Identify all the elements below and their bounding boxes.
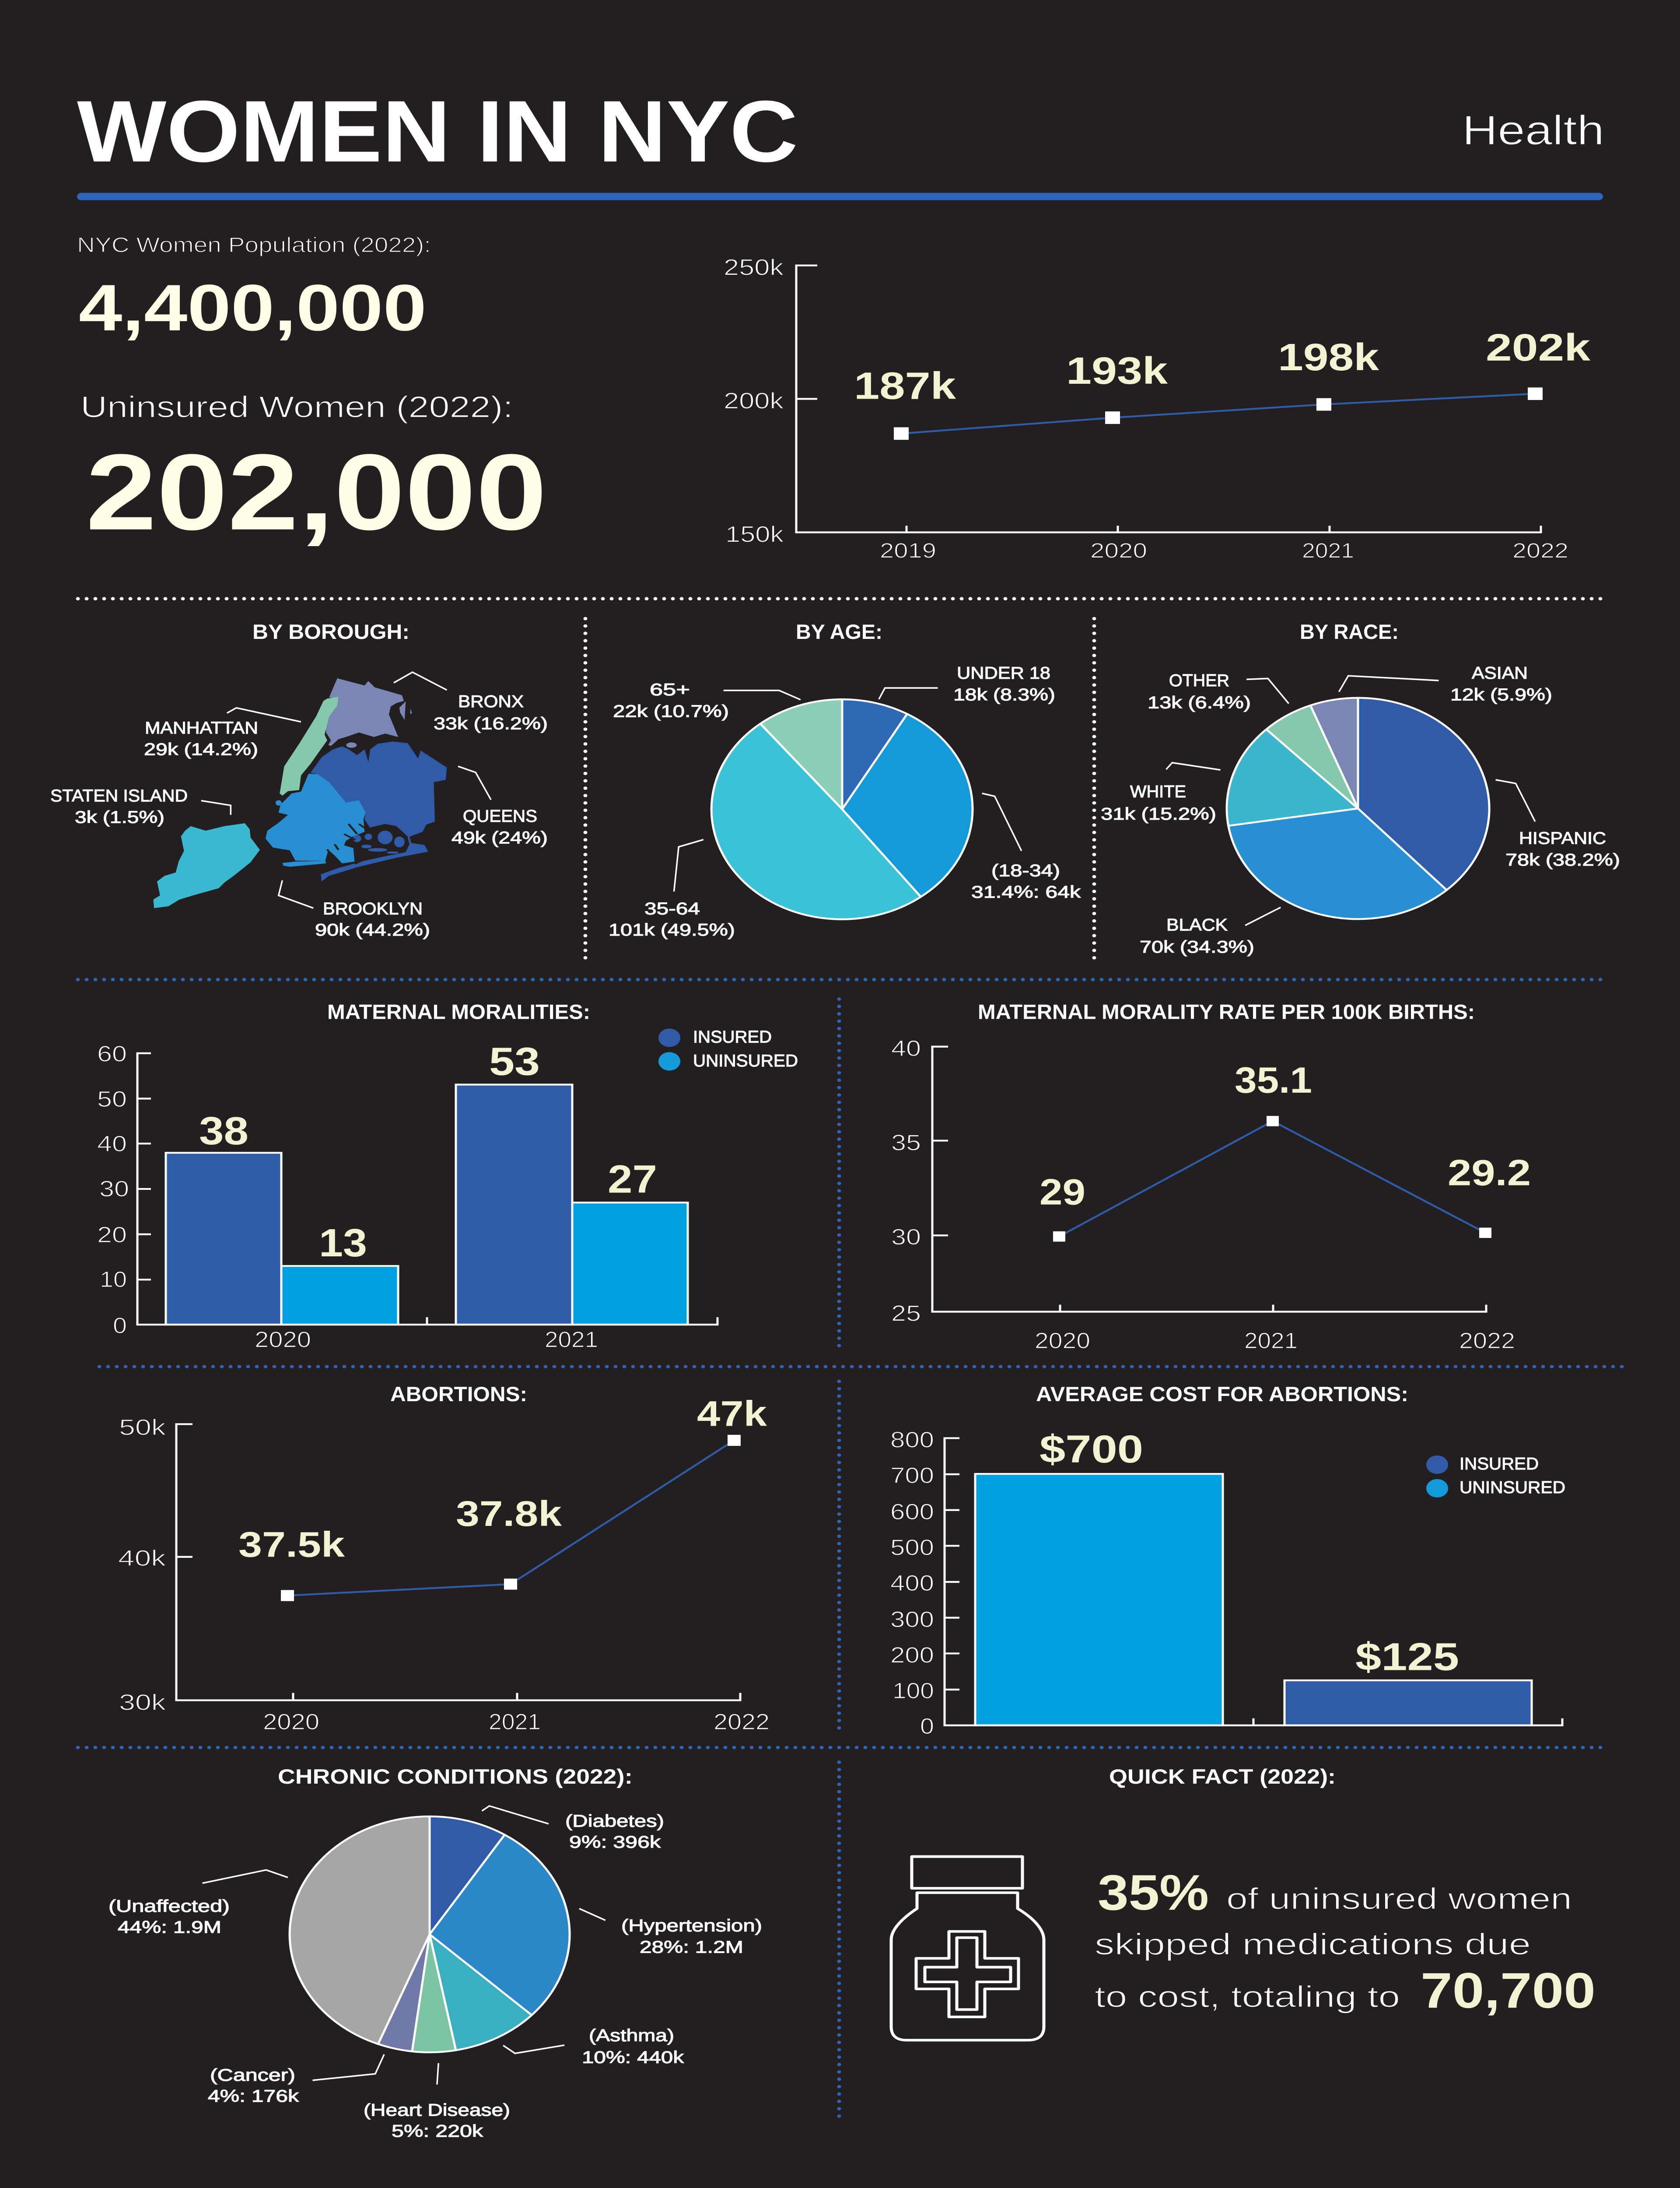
leader lines: age bbox=[674, 688, 1022, 891]
panel: chronic conditions bbox=[108, 1765, 762, 2141]
line chart: abortions: 47k bbox=[697, 1394, 767, 1434]
label: staten island bbox=[50, 786, 188, 827]
line chart: maternal morality rate: 2021 bbox=[1244, 1328, 1298, 1353]
label: queens: QUEENS bbox=[463, 806, 537, 826]
line chart: uninsured women 2019-2022: 150k bbox=[725, 522, 784, 547]
label: queens bbox=[452, 806, 548, 848]
line chart: uninsured women 2019-2022: 187k bbox=[854, 365, 956, 407]
legend: maternal moralities: UNINSURED bbox=[693, 1052, 798, 1070]
bar chart: maternal moralities: 53 bbox=[489, 1039, 540, 1083]
label: NYC women population: NYC Women Population (2022): bbox=[77, 233, 431, 257]
legend: average cost: UNINSURED bbox=[1460, 1478, 1565, 1497]
label: bronx bbox=[434, 692, 548, 733]
line chart: uninsured women 2019-2022: 198k bbox=[1278, 336, 1379, 379]
bar chart: maternal moralities: 50 bbox=[97, 1087, 127, 1112]
line chart: uninsured women 2019-2022: 193k bbox=[1066, 350, 1168, 392]
label: diabetes bbox=[565, 1812, 664, 1852]
bar chart: maternal moralities: 2020 bbox=[255, 1327, 311, 1352]
label: cancer: 4%: 176k bbox=[208, 2086, 299, 2106]
label: 65+: 22k (10.7%) bbox=[613, 702, 729, 721]
line chart: abortions bbox=[118, 1394, 770, 1734]
line chart: maternal morality rate bbox=[891, 1036, 1531, 1353]
line chart: abortions: 2022 bbox=[714, 1709, 770, 1734]
line chart: uninsured women 2019-2022: 200k bbox=[724, 388, 784, 414]
pie chart: race bbox=[1227, 698, 1489, 919]
label: black bbox=[1140, 915, 1254, 957]
label: uninsured women: Uninsured Women (2022): bbox=[80, 390, 513, 424]
label: queens: 49k (24%) bbox=[452, 828, 548, 848]
line chart: uninsured women 2019-2022: 2019 bbox=[880, 539, 936, 563]
text: quick fact statement: 70,700 bbox=[1421, 1962, 1596, 2019]
line chart: maternal morality rate: 40 bbox=[891, 1036, 921, 1061]
line chart: abortions: 2020 bbox=[263, 1709, 319, 1734]
heading: by borough: BY BOROUGH: bbox=[252, 620, 410, 643]
bar chart: average cost: 300 bbox=[890, 1607, 934, 1632]
bar chart: average cost: $700 bbox=[1040, 1427, 1143, 1471]
text: quick fact statement: 35% bbox=[1098, 1864, 1209, 1921]
label: asthma: 10%: 440k bbox=[582, 2048, 684, 2067]
label: asian: ASIAN bbox=[1472, 663, 1528, 683]
pie chart: chronic conditions bbox=[290, 1816, 570, 2052]
title rule bbox=[77, 193, 1603, 200]
label: cancer bbox=[208, 2065, 299, 2106]
line chart: maternal morality rate: 2020 bbox=[1035, 1328, 1090, 1353]
number: 202,000: 202,000 bbox=[86, 432, 547, 553]
label: other: 13k (6.4%) bbox=[1148, 693, 1251, 712]
line chart: abortions: 2021 bbox=[489, 1709, 541, 1734]
label: asthma bbox=[582, 2026, 684, 2067]
bar chart: maternal moralities: 30 bbox=[99, 1176, 129, 1201]
bar chart: average cost: 800 bbox=[890, 1427, 934, 1452]
panel: by borough bbox=[50, 620, 548, 940]
label: cancer: (Cancer) bbox=[210, 2065, 295, 2085]
heading: maternal moralities: MATERNAL MORALITIES: bbox=[327, 1000, 590, 1024]
bar chart: maternal moralities: 2021 bbox=[545, 1327, 598, 1352]
text: quick fact statement bbox=[1095, 1864, 1596, 2019]
panel: quick fact bbox=[891, 1765, 1596, 2040]
bar chart: average cost: 500 bbox=[890, 1535, 934, 1560]
panel: by age bbox=[609, 620, 1081, 940]
line chart: abortions: 37.8k bbox=[456, 1494, 562, 1534]
label: 35-64: 35-64 bbox=[644, 899, 700, 918]
label: heart disease: (Heart Disease) bbox=[364, 2100, 510, 2120]
line chart: abortions: 50k bbox=[119, 1415, 166, 1440]
heading: by age: BY AGE: bbox=[796, 620, 882, 643]
label: asian bbox=[1450, 663, 1552, 705]
label: other: OTHER bbox=[1169, 671, 1229, 690]
label: hypertension: 28%: 1.2M bbox=[640, 1938, 743, 1957]
bar chart: maternal moralities bbox=[97, 1039, 718, 1352]
number: 4,400,000: 4,400,000 bbox=[79, 271, 427, 344]
line chart: uninsured women 2019-2022: 2022 bbox=[1512, 539, 1568, 563]
label: under 18: 18k (8.3%) bbox=[953, 685, 1055, 705]
bar chart: average cost: 400 bbox=[890, 1571, 934, 1595]
heading: maternal morality rate: MATERNAL MORALITY RATE PER 100K BIRTHS: bbox=[978, 1000, 1475, 1024]
label: diabetes: (Diabetes) bbox=[565, 1812, 664, 1831]
label: asian: 12k (5.9%) bbox=[1450, 685, 1552, 705]
label: white bbox=[1101, 782, 1216, 824]
line chart: abortions: 30k bbox=[119, 1690, 166, 1715]
label: brooklyn bbox=[315, 899, 430, 940]
line chart: maternal morality rate: 35.1 bbox=[1235, 1060, 1312, 1101]
label: hispanic bbox=[1505, 829, 1620, 870]
bar chart: maternal moralities: 13 bbox=[319, 1220, 367, 1265]
label: brooklyn: BROOKLYN bbox=[323, 899, 423, 918]
heading: average cost: AVERAGE COST FOR ABORTIONS: bbox=[1036, 1382, 1408, 1406]
label: asthma: (Asthma) bbox=[589, 2026, 674, 2045]
line chart: maternal morality rate: 29.2 bbox=[1448, 1153, 1531, 1193]
leader lines: race bbox=[1166, 676, 1535, 926]
label: hispanic: 78k (38.2%) bbox=[1505, 850, 1620, 870]
label: unaffected: 44%: 1.9M bbox=[118, 1918, 221, 1937]
leader lines: chronic conditions bbox=[203, 1806, 606, 2085]
icon: medicine bottle with cross bbox=[891, 1857, 1044, 2040]
heading: abortions: ABORTIONS: bbox=[390, 1382, 527, 1406]
label: hispanic: HISPANIC bbox=[1519, 829, 1606, 848]
label: 18-34 bbox=[971, 861, 1081, 902]
label: diabetes: 9%: 396k bbox=[569, 1833, 661, 1852]
bar chart: average cost: 700 bbox=[890, 1463, 934, 1488]
line chart: uninsured women 2019-2022: 250k bbox=[724, 255, 784, 280]
label: under 18 bbox=[953, 663, 1055, 705]
panel: population stats bbox=[77, 233, 547, 553]
label: black: 70k (34.3%) bbox=[1140, 937, 1254, 957]
panel: by race bbox=[1101, 620, 1620, 957]
leader lines: boroughs bbox=[201, 672, 491, 908]
legend: maternal moralities: INSURED bbox=[693, 1027, 772, 1047]
label: 35-64: 101k (49.5%) bbox=[609, 921, 735, 940]
line chart: maternal morality rate: 29 bbox=[1040, 1172, 1085, 1213]
label: hypertension bbox=[621, 1916, 762, 1957]
heading: by race: BY RACE: bbox=[1300, 620, 1399, 643]
label: other bbox=[1148, 671, 1251, 712]
pie chart: age bbox=[711, 699, 973, 919]
line chart: uninsured women 2019-2022 bbox=[724, 255, 1591, 563]
label: staten island: STATEN ISLAND bbox=[50, 786, 188, 806]
label: under 18: UNDER 18 bbox=[957, 663, 1050, 683]
line chart: abortions: 37.5k bbox=[238, 1525, 345, 1565]
heading: quick fact: QUICK FACT (2022): bbox=[1109, 1765, 1336, 1788]
line chart: maternal morality rate: 25 bbox=[891, 1301, 921, 1325]
label: black: BLACK bbox=[1166, 915, 1228, 934]
label: manhattan: MANHATTAN bbox=[145, 719, 258, 738]
bar chart: average cost: 600 bbox=[890, 1499, 934, 1524]
label: brooklyn: 90k (44.2%) bbox=[315, 921, 430, 940]
heading: chronic conditions: CHRONIC CONDITIONS (2022): bbox=[278, 1765, 633, 1788]
label: heart disease: 5%: 220k bbox=[392, 2121, 483, 2141]
label: hypertension: (Hypertension) bbox=[621, 1916, 762, 1936]
bar chart: maternal moralities: 10 bbox=[100, 1267, 127, 1292]
line chart: abortions: 40k bbox=[118, 1546, 166, 1571]
text: quick fact statement: of uninsured women bbox=[1226, 1882, 1572, 1916]
legend: average cost: INSURED bbox=[1460, 1454, 1539, 1473]
panel: maternal moralities bbox=[97, 1000, 798, 1352]
legend: average cost bbox=[1426, 1454, 1565, 1497]
bar chart: average cost: 200 bbox=[890, 1643, 934, 1667]
line chart: maternal morality rate: 2022 bbox=[1459, 1328, 1515, 1353]
bar chart: maternal moralities: 20 bbox=[97, 1223, 127, 1247]
panel: average cost for abortions bbox=[890, 1382, 1565, 1739]
bar chart: maternal moralities: 0 bbox=[113, 1313, 127, 1338]
map: NYC boroughs bbox=[153, 678, 447, 908]
line chart: maternal morality rate: 35 bbox=[891, 1130, 921, 1155]
bar chart: average cost bbox=[890, 1427, 1562, 1739]
text: quick fact statement: to cost, totaling to bbox=[1095, 1980, 1400, 2014]
label: white: 31k (15.2%) bbox=[1101, 804, 1216, 824]
label: 18-34: 31.4%: 64k bbox=[971, 883, 1081, 902]
bar chart: average cost: 100 bbox=[892, 1679, 934, 1703]
label: unaffected bbox=[108, 1897, 230, 1937]
line chart: uninsured women 2019-2022: 202k bbox=[1486, 326, 1591, 369]
label: manhattan bbox=[144, 719, 258, 759]
subtitle: health: Health bbox=[1462, 107, 1604, 153]
label: manhattan: 29k (14.2%) bbox=[144, 740, 258, 759]
line chart: uninsured women 2019-2022: 2021 bbox=[1302, 539, 1354, 563]
label: unaffected: (Unaffected) bbox=[108, 1897, 230, 1916]
label: 65+: 65+ bbox=[650, 680, 690, 699]
panel: maternal morality rate bbox=[891, 1000, 1531, 1353]
bar chart: average cost: $125 bbox=[1355, 1634, 1459, 1678]
title: WOMEN IN NYC bbox=[77, 83, 798, 180]
label: 35-64 bbox=[609, 899, 735, 940]
label: heart disease bbox=[364, 2100, 510, 2141]
line chart: maternal morality rate: 30 bbox=[891, 1225, 921, 1249]
label: staten island: 3k (1.5%) bbox=[75, 808, 164, 827]
line chart: uninsured women 2019-2022: 2020 bbox=[1090, 539, 1147, 563]
bar chart: maternal moralities: 60 bbox=[97, 1041, 127, 1066]
bar chart: average cost: 0 bbox=[920, 1714, 934, 1739]
panel: abortions bbox=[118, 1382, 770, 1734]
label: bronx: 33k (16.2%) bbox=[434, 714, 548, 733]
label: 18-34: (18-34) bbox=[991, 861, 1060, 880]
label: white: WHITE bbox=[1130, 782, 1186, 801]
label: 65+ bbox=[613, 680, 729, 721]
legend: maternal moralities bbox=[658, 1027, 798, 1071]
text: quick fact statement: skipped medications due bbox=[1095, 1928, 1531, 1961]
label: bronx: BRONX bbox=[458, 692, 524, 711]
bar chart: maternal moralities: 40 bbox=[97, 1131, 127, 1156]
bar chart: maternal moralities: 27 bbox=[608, 1157, 657, 1201]
bar chart: maternal moralities: 38 bbox=[199, 1108, 248, 1153]
